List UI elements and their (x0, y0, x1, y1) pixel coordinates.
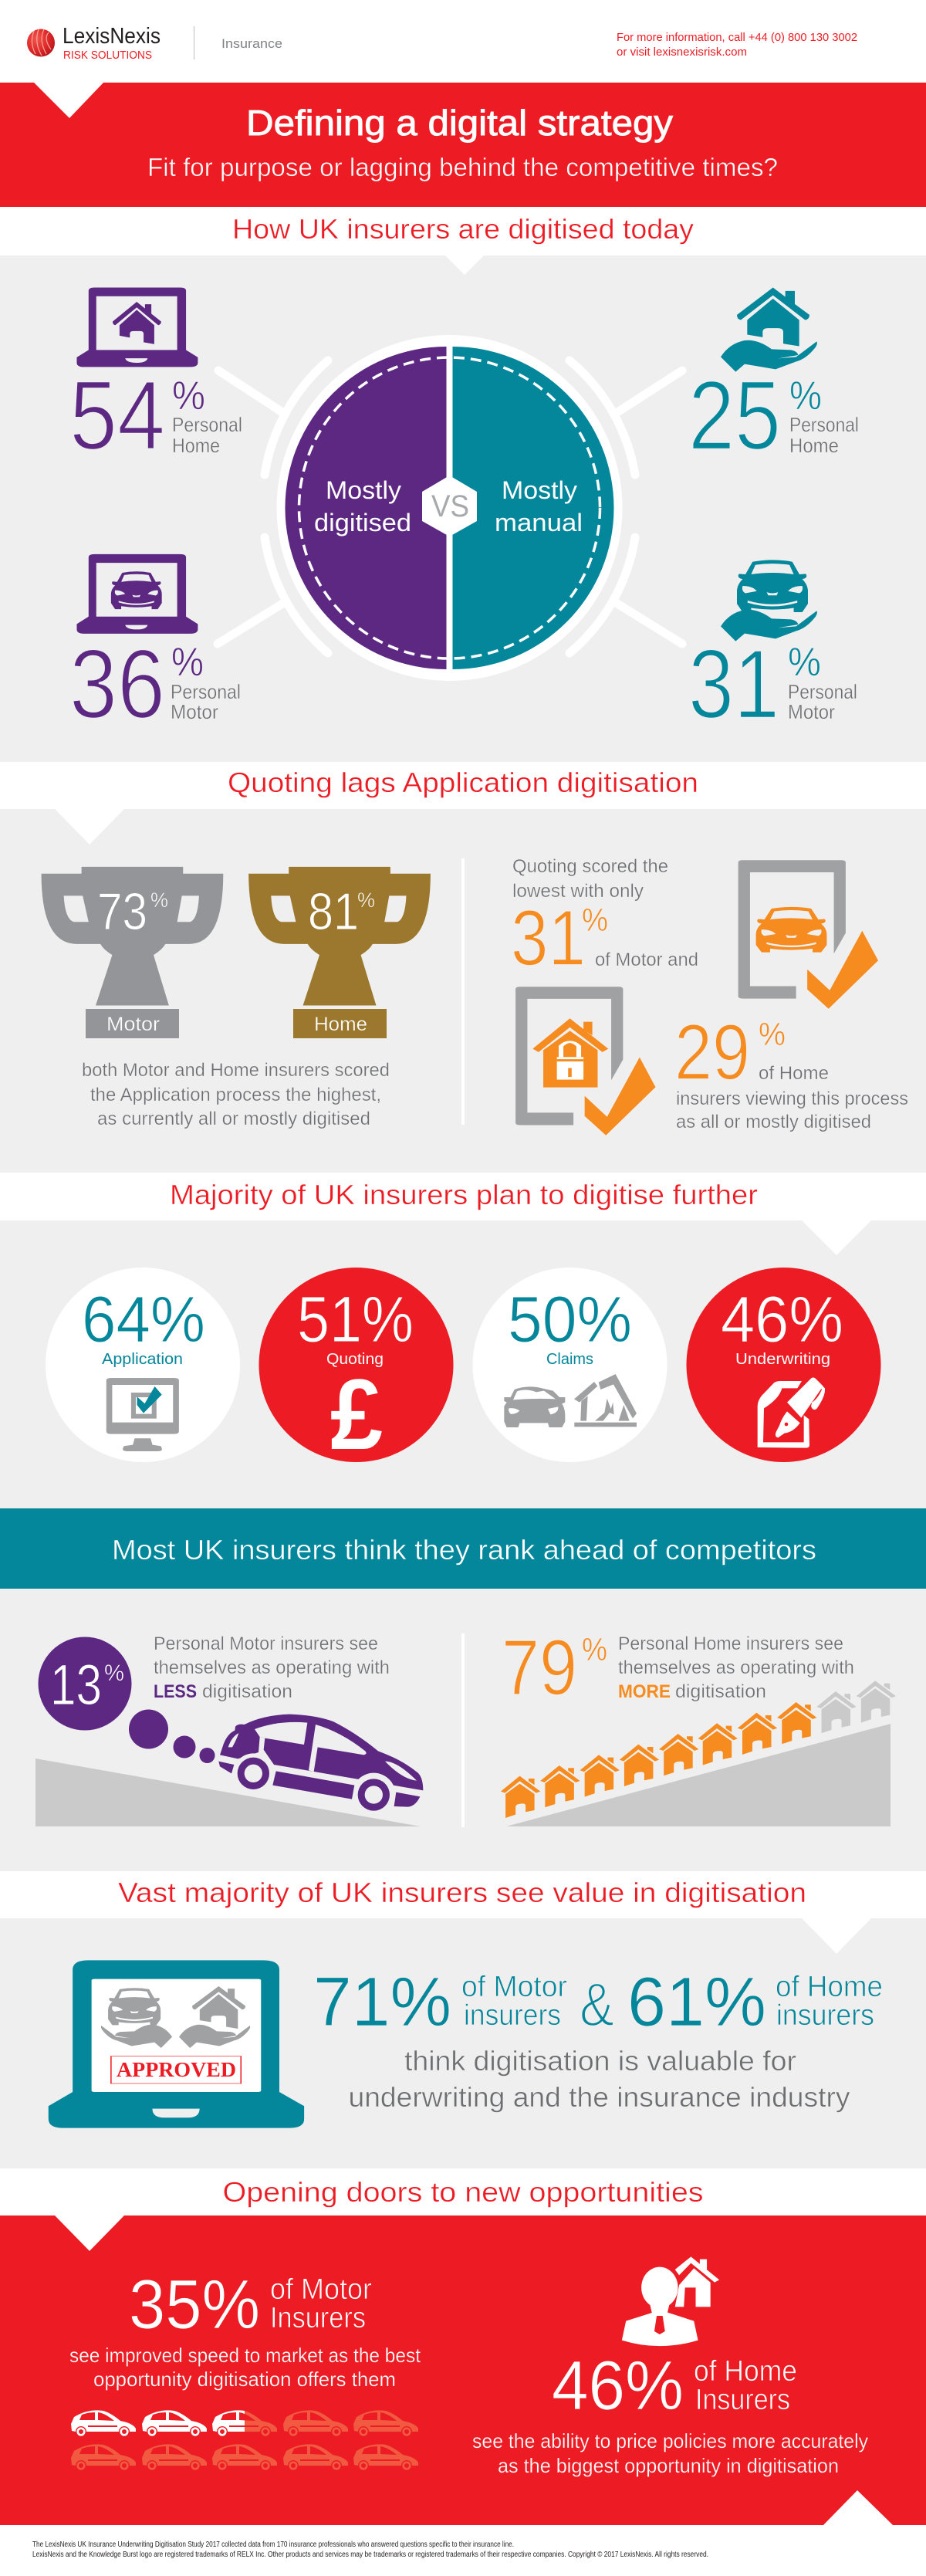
trophy: motor 73 percent: Motor (106, 1014, 160, 1035)
footer notes: The LexisNexis UK Insurance Underwriting Digitisation Study 2017 collected data from 170 insurance professionals who answered questions specific to their insurance line. (32, 2540, 514, 2549)
stat: 54 percent personal home: % (172, 374, 205, 418)
thought bubbles with 13 percent: 13 (50, 1653, 102, 1717)
stat: 25 percent personal home: Home (789, 434, 839, 457)
stats: 71 percent and 61 percent: 61% (627, 1964, 766, 2041)
stat: 36 percent personal motor: 36 (69, 629, 165, 739)
text: think digitisation is valuable: think digitisation is valuable for (404, 2045, 796, 2077)
panel: rank ahead of competitors (0, 1589, 926, 1871)
icon: tablet with car and tick (738, 860, 878, 1009)
text: speed to market: opportunity digitisation offers them (93, 2368, 396, 2391)
risk solutions: RISK SOLUTIONS (63, 49, 152, 62)
wordmark: LexisNexis (63, 24, 161, 49)
text: motor insurers less digitisation: digitisation (202, 1681, 292, 1702)
banner: most UK insurers rank ahead (0, 1508, 926, 1589)
stat: 35 percent of motor insurers: of Motor (270, 2273, 372, 2306)
contact text (617, 31, 857, 59)
text: application scored highest: both Motor and Home insurers scored (82, 1060, 390, 1081)
thought bubbles with 13 percent (39, 1637, 215, 1763)
text: think digitisation is valuable: underwriting and the insurance industry (349, 2081, 850, 2113)
footer notes: LexisNexis and the Knowledge Burst logo are registered trademarks of RELX Inc. Other products and services may be trademarks or registered trademarks of their respective companies. Copyright © 2017 LexisNexis. All rights reserved. (32, 2551, 708, 2559)
stats: 71 percent and 61 percent: of Home (776, 1971, 883, 2003)
text: quoting 31 percent of motor (511, 856, 698, 982)
icon: tablet with locked house and tick (515, 987, 655, 1136)
contact text: or visit lexisnexisrisk.com (617, 46, 747, 59)
stat: 54 percent personal home: 54 (69, 361, 165, 470)
stats: 71 percent and 61 percent: & (580, 1970, 614, 2039)
circle: quoting 51 percent (259, 1268, 454, 1471)
stat: 25 percent personal home: % (789, 374, 822, 418)
circle: underwriting 46 percent (687, 1268, 881, 1462)
trophy: home 81 percent: % (357, 889, 375, 912)
text: home insurers more digitisation: MORE (618, 1681, 671, 1702)
trophy: motor 73 percent: 73 (97, 882, 147, 941)
text: motor insurers less digitisation: LESS (154, 1681, 197, 1702)
text: price policies accurately: see the ability to price policies more accurately (472, 2429, 868, 2452)
panel: plans to digitise further (0, 1220, 926, 1508)
thought bubbles with 13 percent: % (104, 1660, 124, 1686)
text: motor insurers less digitisation: themselves as operating with (154, 1657, 390, 1678)
circle: quoting 51 percent: Quoting (326, 1351, 384, 1368)
circle: underwriting 46 percent: Underwriting (735, 1351, 830, 1368)
stat: 35 percent of motor insurers: 35% (129, 2266, 260, 2344)
stat: 46 percent of home insurers (552, 2348, 797, 2425)
stat: 46 percent of home insurers: of Home (694, 2355, 797, 2388)
stat: 36 percent personal motor: % (171, 640, 204, 685)
icon: laptop approved (49, 1960, 304, 2128)
trophy: motor 73 percent (42, 867, 223, 1038)
stat: 25 percent personal home: 25 (688, 361, 781, 470)
heading: opening doors: Opening doors to new opportunities (222, 2176, 704, 2208)
stats: 71 percent and 61 percent: of Motor (461, 1971, 567, 2003)
stat: 31 percent personal motor: Motor (788, 700, 835, 723)
text: home insurers more digitisation: % (582, 1631, 607, 1667)
stat: 25 percent personal home (688, 361, 859, 470)
stat: 46 percent of home insurers: Insurers (695, 2384, 790, 2416)
stat: 46 percent of home insurers: 46% (552, 2348, 684, 2425)
text: home insurers more digitisation (502, 1623, 854, 1711)
icon: person with house (622, 2256, 719, 2346)
trophy: home 81 percent: Home (314, 1014, 367, 1035)
banner: most UK insurers rank ahead: Most UK insurers think they rank ahead of competitors (112, 1534, 816, 1566)
icon: car rolling downhill (218, 1715, 423, 1816)
stat: 36 percent personal motor: Motor (171, 700, 218, 723)
icon: row of rising houses (501, 1681, 896, 1818)
stat: 36 percent personal motor (69, 629, 241, 739)
text: application scored highest: as currently all or mostly digitised (97, 1109, 370, 1129)
heading: how UK insurers are digitised today: How UK insurers are digitised today (232, 213, 694, 245)
icon: fountain pen and document (758, 1377, 825, 1448)
icon: hand holding car (721, 560, 817, 641)
footer notes (32, 2540, 708, 2559)
text: home insurers more digitisation: 79 (502, 1623, 577, 1711)
comparison circle: digitised (314, 509, 411, 537)
stat: 54 percent personal home (69, 361, 242, 470)
circle: underwriting 46 percent: 46% (721, 1283, 843, 1356)
text: 29 percent of home: % (759, 1016, 786, 1052)
stat: 35 percent of motor insurers: Insurers (270, 2302, 366, 2334)
text: 29 percent of home: 29 (674, 1008, 750, 1096)
contact text: For more information, call +44 (0) 800 130 3002 (617, 31, 857, 44)
title: Defining a digital strategy (246, 103, 673, 143)
header logo (27, 24, 282, 62)
text: 29 percent of home: of Home (759, 1063, 829, 1084)
icon: laptop with car (76, 554, 198, 634)
comparison circle: VS (431, 489, 469, 523)
insurance label: Insurance (221, 36, 282, 51)
text: motor insurers less digitisation: Personal Motor insurers see (154, 1633, 378, 1654)
stat: 54 percent personal home: Personal (172, 413, 242, 436)
heading: majority plan to digitise further: Majority of UK insurers plan to digitise further (170, 1179, 758, 1210)
stat: 25 percent personal home: Personal (789, 413, 859, 436)
trophy: home 81 percent: 81 (308, 882, 359, 941)
icon array: ten cars, 35 percent filled (71, 2410, 418, 2469)
stats: 71 percent and 61 percent: 71% (313, 1964, 451, 2041)
text: speed to market: see improved speed to market as the best (69, 2344, 421, 2367)
text: quoting 31 percent of motor: Quoting scored the (512, 856, 668, 877)
comparison circle: Mostly (502, 476, 577, 504)
circle: application 64 percent: Application (102, 1351, 183, 1368)
comparison circle: Mostly (326, 476, 401, 504)
heading: quoting lags application digitisation: Quoting lags Application digitisation (228, 767, 698, 798)
stat: 54 percent personal home: Home (172, 434, 220, 457)
trophy: home 81 percent (248, 867, 431, 1038)
stat: 36 percent personal motor: Personal (171, 680, 241, 703)
text: quoting 31 percent of motor: lowest with only (512, 881, 644, 902)
text: quoting 31 percent of motor: 31 (511, 894, 586, 982)
comparison circle: manual (495, 509, 583, 537)
text: quoting 31 percent of motor: % (582, 902, 608, 938)
circle: quoting 51 percent: £ (330, 1358, 383, 1471)
text: think digitisation is valuable (349, 2045, 850, 2113)
approved stamp text: APPROVED (117, 2058, 236, 2081)
text: application scored highest: the Application process the highest, (90, 1085, 381, 1105)
circle: claims 50 percent: Claims (546, 1351, 593, 1368)
text: price policies accurately: as the biggest opportunity in digitisation (498, 2454, 839, 2477)
panel: quoting lags application (0, 809, 926, 1173)
stat: 31 percent personal motor (688, 629, 857, 739)
stat: 31 percent personal motor: Personal (788, 680, 857, 703)
panel: new opportunities (0, 2215, 926, 2525)
logo sphere (27, 29, 55, 57)
circle: claims 50 percent: 50% (508, 1283, 632, 1356)
stat: 31 percent personal motor: % (788, 640, 821, 685)
icon: hand holding house (721, 287, 817, 372)
text: 29 percent of home: as all or mostly digitised (676, 1112, 871, 1132)
text: home insurers more digitisation: Personal Home insurers see (618, 1633, 843, 1654)
text: home insurers more digitisation: digitisation (675, 1681, 766, 1702)
text: 29 percent of home: insurers viewing this process (676, 1088, 908, 1109)
stats: 71 percent and 61 percent (313, 1964, 883, 2041)
stat: 31 percent personal motor: 31 (688, 629, 779, 739)
subtitle: Fit for purpose or lagging behind the competitive times? (147, 153, 778, 181)
panel: digitised vs manual (0, 256, 926, 762)
comparison circle (276, 335, 622, 681)
text: home insurers more digitisation: themselves as operating with (618, 1657, 854, 1678)
text: application scored highest (82, 1060, 390, 1129)
circle: application 64 percent (46, 1268, 240, 1462)
title banner (0, 83, 926, 207)
circle: application 64 percent: 64% (82, 1283, 205, 1356)
stats: 71 percent and 61 percent: insurers (776, 1999, 874, 2032)
stat: 35 percent of motor insurers (129, 2266, 372, 2344)
text: price policies accurately (472, 2429, 868, 2477)
icon: crashed car and collapsed house (504, 1374, 637, 1427)
text: 29 percent of home (674, 1008, 908, 1132)
text: motor insurers less digitisation (154, 1633, 390, 1702)
icon: laptop with house (76, 288, 198, 367)
heading: vast majority see value: Vast majority of UK insurers see value in digitisation (118, 1877, 806, 1908)
stats: 71 percent and 61 percent: insurers (464, 1999, 561, 2032)
trophy: motor 73 percent: % (150, 889, 168, 912)
circle: claims 50 percent (472, 1268, 667, 1462)
text: speed to market (69, 2344, 421, 2391)
circle: quoting 51 percent: 51% (297, 1283, 414, 1356)
panel: value in digitisation (0, 1918, 926, 2168)
text: quoting 31 percent of motor: of Motor and (595, 949, 698, 970)
